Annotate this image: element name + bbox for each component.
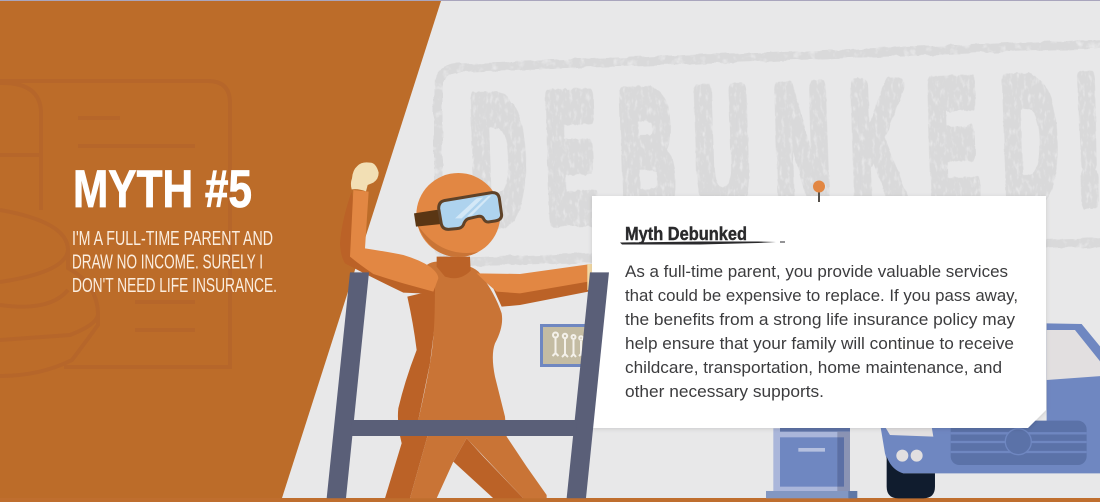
car windscreen xyxy=(1047,330,1100,380)
goggles xyxy=(439,193,502,229)
card body text xyxy=(625,262,1018,401)
figure head shading xyxy=(417,224,478,257)
myth statement: I'M A FULL-TIME PARENT AND xyxy=(72,227,273,250)
figure raised arm shadow xyxy=(340,192,435,294)
car wheel xyxy=(887,457,935,498)
myth statement xyxy=(72,227,277,297)
figure back shading xyxy=(385,290,435,498)
watermark: document and coins xyxy=(0,81,230,376)
illustration: wrench board xyxy=(542,326,590,366)
figure outstretched arm shadow xyxy=(493,280,588,307)
figure raised arm xyxy=(350,190,438,292)
illustration: figure with goggles xyxy=(340,162,592,498)
car headlights xyxy=(896,450,923,462)
brush underline xyxy=(620,242,785,244)
figure rear leg xyxy=(453,438,523,498)
goggle strap xyxy=(414,209,442,227)
card body text: other necessary supports. xyxy=(625,382,824,401)
illustration: tool cabinet xyxy=(766,425,857,498)
card heading: Myth Debunked xyxy=(625,224,747,244)
goggle glare xyxy=(455,195,492,218)
stamp word: DEBUNKED! xyxy=(467,40,1100,260)
card body text: childcare, transportation, home maintenance, and xyxy=(625,358,1002,377)
card background xyxy=(592,196,1046,428)
illustration: blue car xyxy=(880,323,1100,498)
heading: myth number: MYTH #5 xyxy=(73,160,252,219)
card body text: that could be expensive to replace. If you pass away, xyxy=(625,286,1018,305)
icon: wrenches xyxy=(552,332,583,357)
stamp border xyxy=(438,44,1100,262)
figure torso and front leg xyxy=(410,262,547,498)
figure head xyxy=(416,173,500,257)
bottom strip xyxy=(0,498,1100,502)
card: myth debunked xyxy=(592,180,1046,428)
card body text: help ensure that your family will continue to receive xyxy=(625,334,1014,353)
stamp: debunked xyxy=(438,40,1100,262)
card body text: As a full-time parent, you provide valuable services xyxy=(625,262,1008,281)
figure fist xyxy=(351,162,379,191)
icon: pin xyxy=(813,180,825,202)
figure neck xyxy=(437,257,471,278)
orange left panel xyxy=(0,1,441,498)
car bumper strip xyxy=(885,427,933,437)
car roof and body xyxy=(880,323,1100,473)
myth statement: DRAW NO INCOME. SURELY I xyxy=(72,250,263,274)
car grille xyxy=(951,421,1087,465)
myth statement: DON'T NEED LIFE INSURANCE. xyxy=(72,274,277,297)
illustration: ladder frame xyxy=(327,272,609,498)
figure hand xyxy=(587,264,592,290)
figure outstretched arm xyxy=(477,264,588,293)
card body text: the benefits from a strong life insurance policy may xyxy=(625,310,1016,329)
